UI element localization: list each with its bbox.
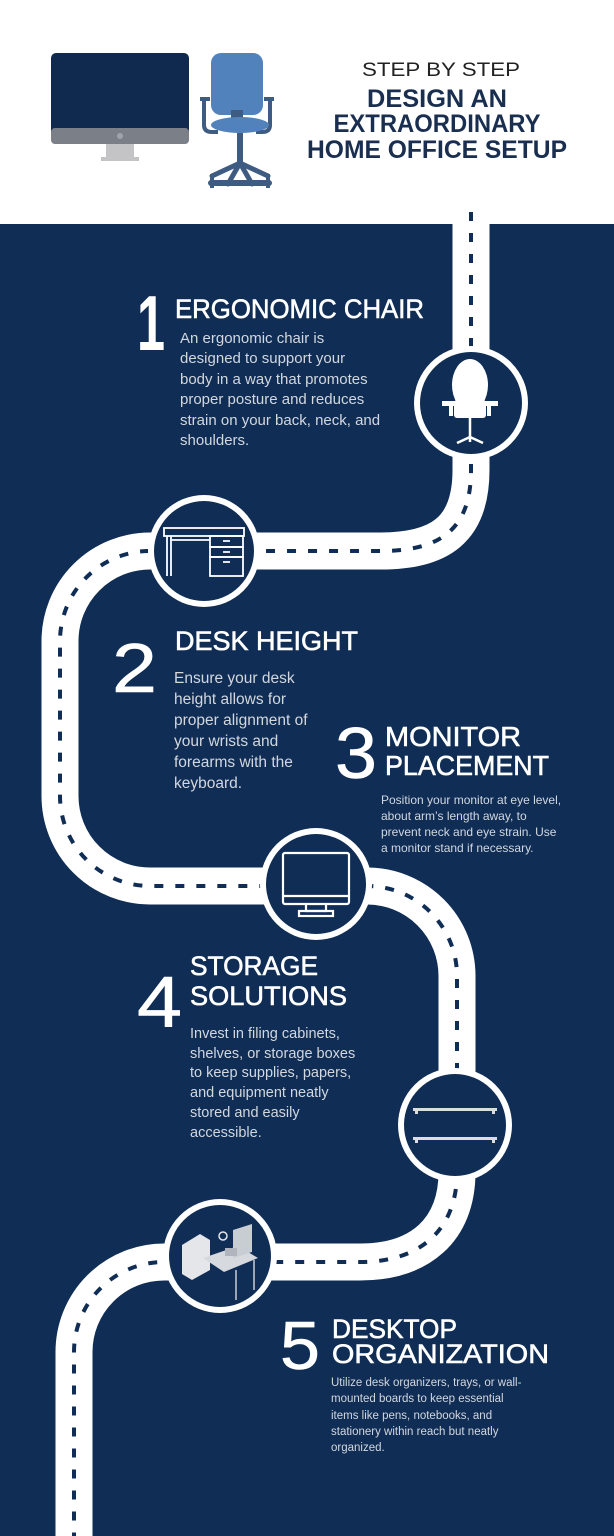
step 3: PLACEMENT	[385, 750, 549, 781]
step 5: items like pens, notebooks, and	[331, 1410, 492, 1422]
step 5	[280, 1308, 549, 1454]
step 2: 2	[112, 629, 157, 707]
step 4: SOLUTIONS	[190, 981, 347, 1011]
step 3	[335, 714, 561, 855]
road	[60, 205, 471, 1536]
step 4: 4	[137, 963, 182, 1043]
step 1: An ergonomic chair is	[180, 330, 324, 347]
circle 3: monitor icon	[260, 828, 372, 940]
step 2: proper alignment of	[174, 712, 308, 729]
step 3: prevent neck and eye strain. Use	[381, 825, 557, 839]
circle 2: desk icon	[148, 495, 260, 607]
step 4: Invest in filing cabinets,	[190, 1026, 340, 1042]
step 4: to keep supplies, papers,	[190, 1065, 351, 1081]
step 1: shoulders.	[180, 432, 249, 449]
step 2: height allows for	[174, 691, 286, 708]
title: DESIGN AN	[367, 85, 507, 113]
step 4	[137, 951, 355, 1141]
icon: header chair	[200, 53, 274, 188]
step 5: organized.	[331, 1442, 385, 1454]
step 3: 3	[335, 714, 377, 794]
step 3: about arm’s length away, to	[381, 809, 527, 823]
step 1	[137, 279, 424, 449]
circle 1: chair icon	[414, 346, 528, 460]
step 4: accessible.	[190, 1125, 262, 1141]
step 4: stored and easily	[190, 1105, 300, 1121]
title: HOME OFFICE SETUP	[307, 136, 567, 164]
step 5: Utilize desk organizers, trays, or wall-	[331, 1377, 522, 1389]
step 1: ERGONOMIC CHAIR	[175, 294, 424, 324]
step 4: STORAGE	[190, 951, 318, 981]
step 4: shelves, or storage boxes	[190, 1046, 355, 1062]
step 2: your wrists and	[174, 733, 278, 750]
step 4: and equipment neatly	[190, 1085, 329, 1101]
step 5: DESKTOP	[332, 1314, 457, 1344]
step 5: mounted boards to keep essential	[331, 1393, 504, 1405]
step 5: ORGANIZATION	[332, 1339, 549, 1369]
step 1: designed to support your	[180, 350, 345, 367]
step 2: forearms with the	[174, 754, 293, 771]
step 1: 1	[137, 279, 165, 367]
circle 5: office desk icon	[163, 1199, 277, 1313]
step 1: proper posture and reduces	[180, 391, 364, 408]
step 5: 5	[280, 1308, 320, 1384]
icon: header monitor	[51, 53, 189, 161]
step 3: a monitor stand if necessary.	[381, 841, 534, 855]
step 2: DESK HEIGHT	[175, 626, 358, 656]
step 1: strain on your back, neck, and	[180, 412, 380, 429]
step 2: Ensure your desk	[174, 670, 295, 687]
title	[307, 60, 567, 164]
step 5: stationery within reach but neatly	[331, 1426, 499, 1438]
step 2: keyboard.	[174, 775, 242, 792]
circle 4: shelves icon	[398, 1068, 512, 1182]
step 3: Position your monitor at eye level,	[381, 793, 561, 807]
step 3: MONITOR	[385, 721, 521, 752]
step 2	[112, 626, 358, 792]
title: STEP BY STEP	[362, 60, 520, 81]
step 1: body in a way that promotes	[180, 371, 368, 388]
title: EXTRAORDINARY	[334, 110, 541, 138]
